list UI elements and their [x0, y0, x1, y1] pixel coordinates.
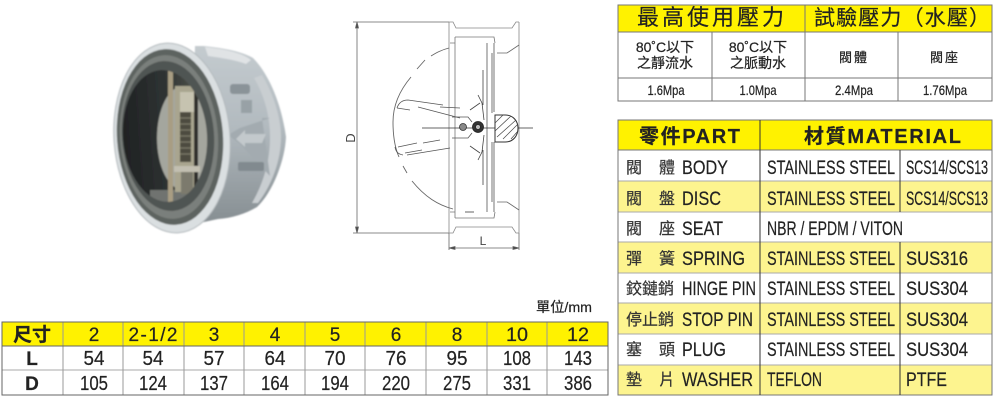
row: spring: 彈: [626, 251, 642, 268]
heading: max working pressure: 最高使用壓力: [637, 5, 784, 30]
row: L values: L: [26, 349, 38, 370]
heading: test pressure: 試驗壓力（水壓）: [814, 7, 990, 30]
row: stop pin: STOP PIN: [682, 310, 753, 331]
row: L values: 54: [142, 348, 164, 370]
heading: material: 材質MATERIAL: [804, 125, 961, 148]
internal discs, stop pin and spring: [150, 68, 209, 205]
valve body outline: [449, 22, 519, 233]
pressure values: 1.6Mpa: [648, 82, 685, 98]
row: seat: NBR / EPDM / VITON: [767, 219, 903, 240]
valve bore: [118, 67, 212, 205]
product photo: wafer check valve: [108, 39, 286, 237]
plug cross-section: [495, 115, 518, 142]
row: body: BODY: [682, 158, 728, 179]
condition cells: 閥座: [930, 50, 960, 65]
dimension L: [449, 233, 519, 250]
row: washer: TEFLON: [767, 370, 822, 391]
row: body: 體: [659, 159, 675, 177]
dimension D: [343, 22, 449, 233]
row: size header: 2-1/2: [128, 325, 178, 346]
row: hinge pin: SUS304: [906, 279, 968, 300]
row: washer: PTFE: [906, 370, 947, 391]
row: D values: 194: [321, 373, 349, 395]
row: L values: 108: [503, 348, 531, 370]
row: plug: 塞: [626, 341, 642, 359]
pressure table background and header: [618, 5, 992, 101]
row: plug: SUS304: [906, 340, 968, 361]
row: washer: WASHER: [682, 370, 753, 391]
row: size header: 6: [391, 325, 401, 346]
row: disc: [626, 189, 988, 210]
row: seat: 閥: [626, 221, 642, 238]
row: size header: 10: [506, 325, 528, 346]
row: disc: STAINLESS STEEL: [767, 189, 895, 210]
row: plug: [626, 340, 968, 361]
row: body: STAINLESS STEEL: [767, 158, 895, 179]
row: D values: 386: [564, 373, 592, 395]
row: size header: 3: [209, 325, 219, 346]
row: body: 閥: [626, 160, 642, 177]
row: body: [626, 158, 988, 179]
row: D values: [25, 373, 592, 395]
valve body: [190, 46, 286, 225]
size table background and grid: [2, 322, 608, 395]
row: hinge pin: HINGE PIN: [682, 279, 756, 300]
row: size header: 4: [270, 325, 281, 346]
technical drawing: section view of valve: [343, 22, 533, 250]
row: washer: 片: [659, 371, 675, 389]
pressure values: 1.76Mpa: [923, 82, 967, 98]
row: D values: 220: [382, 373, 410, 395]
row: L values: 76: [386, 348, 406, 370]
row: L values: 143: [564, 348, 592, 370]
row: size header: 尺寸: [13, 324, 51, 346]
row: D values: 105: [80, 373, 108, 395]
row: spring: SUS316: [906, 249, 968, 270]
heading: part: 零件PART: [639, 125, 740, 148]
row: L values: 54: [84, 348, 104, 370]
row: L values: 57: [204, 348, 224, 370]
condition cells: 80˚C以下: [636, 39, 694, 55]
row: spring: STAINLESS STEEL: [767, 249, 895, 270]
row: size header: 8: [452, 325, 462, 346]
condition cells: 閥體: [839, 50, 869, 65]
row: L values: 95: [446, 348, 468, 370]
row: washer: [626, 370, 947, 391]
body casting marks and flow arrow: [228, 118, 270, 176]
row: plug: STAINLESS STEEL: [767, 340, 895, 361]
size table: [2, 322, 608, 395]
disc and hinge lines: [395, 100, 460, 155]
dimension D: D: [343, 133, 358, 143]
condition cells: [636, 39, 960, 71]
row: D values: 331: [503, 373, 531, 395]
hinge pin: [472, 122, 484, 132]
row: spring: [626, 249, 968, 270]
unit label: 單位/mm: [536, 299, 592, 315]
row: plug: 頭: [659, 342, 675, 359]
stop pin: [460, 124, 466, 130]
pressure values: [648, 82, 967, 98]
row: disc: 盤: [659, 190, 675, 208]
dimension L: L: [480, 234, 487, 248]
row: size header: 2: [89, 325, 99, 346]
condition cells: 之靜流水: [637, 55, 693, 71]
pressure values: 2.4Mpa: [835, 82, 873, 98]
row: stop pin: [626, 310, 968, 331]
row: stop pin: STAINLESS STEEL: [767, 310, 895, 331]
row: size header: 5: [330, 325, 340, 346]
row: D values: 164: [261, 373, 289, 395]
row: disc: 閥: [626, 191, 642, 208]
row: L values: [26, 348, 592, 370]
row: hinge pin: 鉸鏈銷: [626, 280, 674, 298]
row: size header: [13, 324, 589, 346]
row: hinge pin: STAINLESS STEEL: [767, 279, 895, 300]
row: D values: 124: [139, 373, 167, 395]
row: D values: D: [25, 374, 39, 395]
condition cells: 80˚C以下: [729, 39, 787, 55]
row: plug: PLUG: [682, 340, 726, 361]
row: D values: 275: [443, 373, 471, 395]
row: spring: SPRING: [682, 249, 745, 270]
row: stop pin: 停止銷: [626, 311, 674, 329]
centre line: [422, 127, 533, 129]
parts table backgrounds: [618, 120, 992, 395]
rubber seat: [111, 46, 229, 228]
pressure table: [618, 5, 992, 101]
row: washer: 墊: [626, 371, 642, 389]
row: D values: 137: [200, 373, 228, 395]
row: spring: 簧: [659, 250, 675, 268]
condition cells: 之脈動水: [730, 55, 786, 71]
row: stop pin: SUS304: [906, 310, 968, 331]
row: hinge pin: [626, 279, 968, 300]
open disc swing arc: [393, 48, 474, 212]
row: L values: 70: [324, 348, 346, 370]
row: disc: DISC: [682, 189, 721, 210]
row: seat: 座: [659, 220, 675, 238]
row: size header: 12: [567, 325, 589, 346]
row: seat: SEAT: [682, 219, 723, 240]
row: seat: [626, 219, 903, 240]
front flange ring: [108, 39, 236, 237]
row: L values: 64: [264, 348, 286, 370]
pressure values: 1.0Mpa: [740, 82, 777, 98]
parts and material table: [618, 120, 992, 395]
